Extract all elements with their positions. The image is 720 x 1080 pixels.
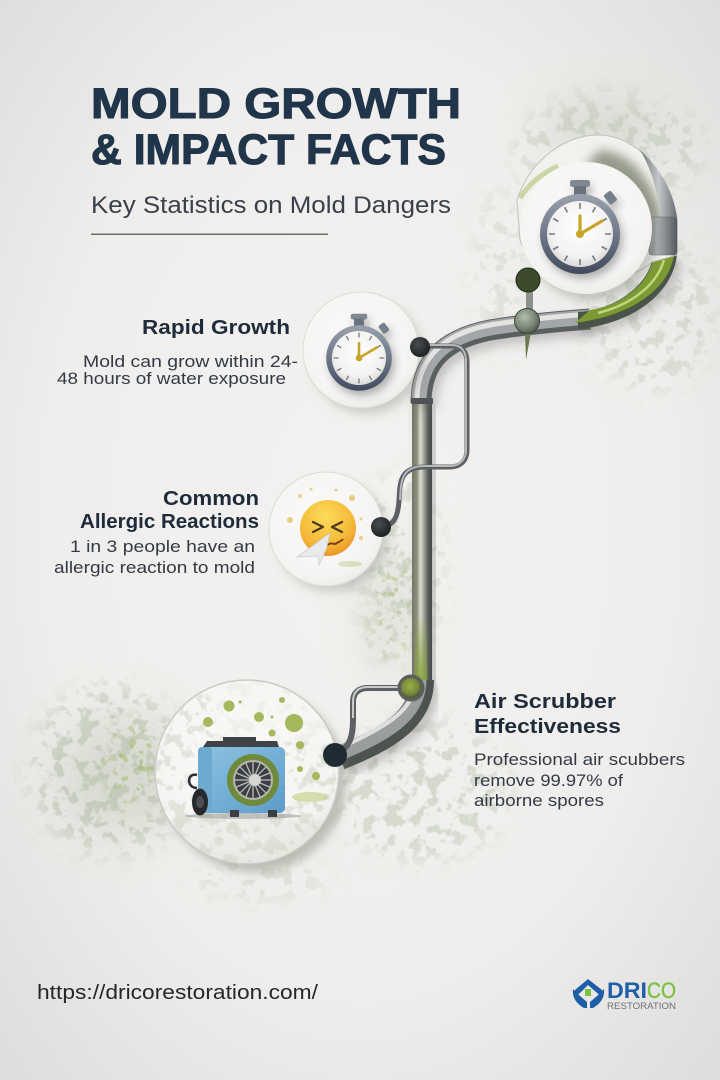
mottled texture inside circle	[156, 682, 337, 863]
heading: Effectiveness	[474, 716, 621, 738]
text block: rapid growth	[57, 317, 298, 388]
chrome tip	[640, 150, 677, 218]
spores	[203, 697, 320, 780]
body: Mold can grow within 24-	[83, 353, 298, 371]
title: MOLD GROWTH	[91, 80, 461, 128]
subtitle: Key Statistics on Mold Dangers	[91, 192, 451, 219]
text block: air scrubber effectiveness	[474, 691, 685, 810]
icon: small stopwatch	[326, 314, 392, 391]
body: Professional air scubbers	[474, 751, 685, 769]
logo: Drico Restoration: RESTORATION	[607, 1001, 676, 1011]
body: 1 in 3 people have an	[70, 538, 255, 556]
icon: large stopwatch	[540, 180, 620, 274]
website url: https://dricorestoration.com/	[37, 982, 318, 1004]
panel: allergic reactions circle	[269, 472, 388, 592]
icon: air scrubber	[185, 737, 301, 819]
valve and nodes on upper pipe	[514, 268, 540, 360]
green pipe section	[575, 255, 677, 329]
heading: Allergic Reactions	[80, 511, 259, 533]
body: 48 hours of water exposure	[57, 370, 286, 388]
panel: top circle backing arc	[517, 135, 677, 281]
icon: house in hands	[573, 979, 604, 1008]
mold splatter background	[22, 84, 719, 902]
thin connector tube to rapid growth and allergic circles	[381, 345, 467, 527]
heading: Rapid Growth	[142, 317, 290, 339]
lower elbow pipe	[340, 680, 422, 758]
lower connector tube	[340, 687, 405, 752]
title	[91, 80, 461, 174]
panel: rapid growth circle	[303, 292, 424, 414]
main pipe assembly	[340, 255, 677, 758]
logo: Drico Restoration: CO	[647, 978, 676, 1003]
title divider	[91, 234, 328, 235]
icon: sneezing face	[287, 488, 363, 567]
elbow collar	[411, 398, 433, 404]
logo: Drico Restoration	[573, 978, 676, 1011]
body: airborne spores	[474, 792, 604, 810]
body	[54, 538, 255, 577]
connector balls	[323, 337, 430, 767]
wordmark: DRI	[607, 978, 647, 1003]
title: & IMPACT FACTS	[91, 126, 446, 174]
text block: common allergic reactions	[54, 488, 259, 577]
upper elbow and horizontal pipe	[417, 314, 590, 403]
body: allergic reaction to mold	[54, 559, 255, 577]
body	[57, 353, 298, 388]
panel: top stopwatch circle	[520, 162, 657, 301]
panel: air scrubber circle	[150, 680, 346, 872]
green stripe on vertical pipe	[415, 615, 427, 682]
heading: Air Scrubber	[474, 691, 616, 713]
vertical pipe	[412, 400, 432, 682]
heading	[474, 691, 621, 738]
heading	[80, 488, 259, 533]
heading: Common	[163, 488, 259, 510]
clamp	[649, 217, 677, 255]
body	[474, 751, 685, 810]
body: remove 99.97% of	[474, 772, 623, 790]
